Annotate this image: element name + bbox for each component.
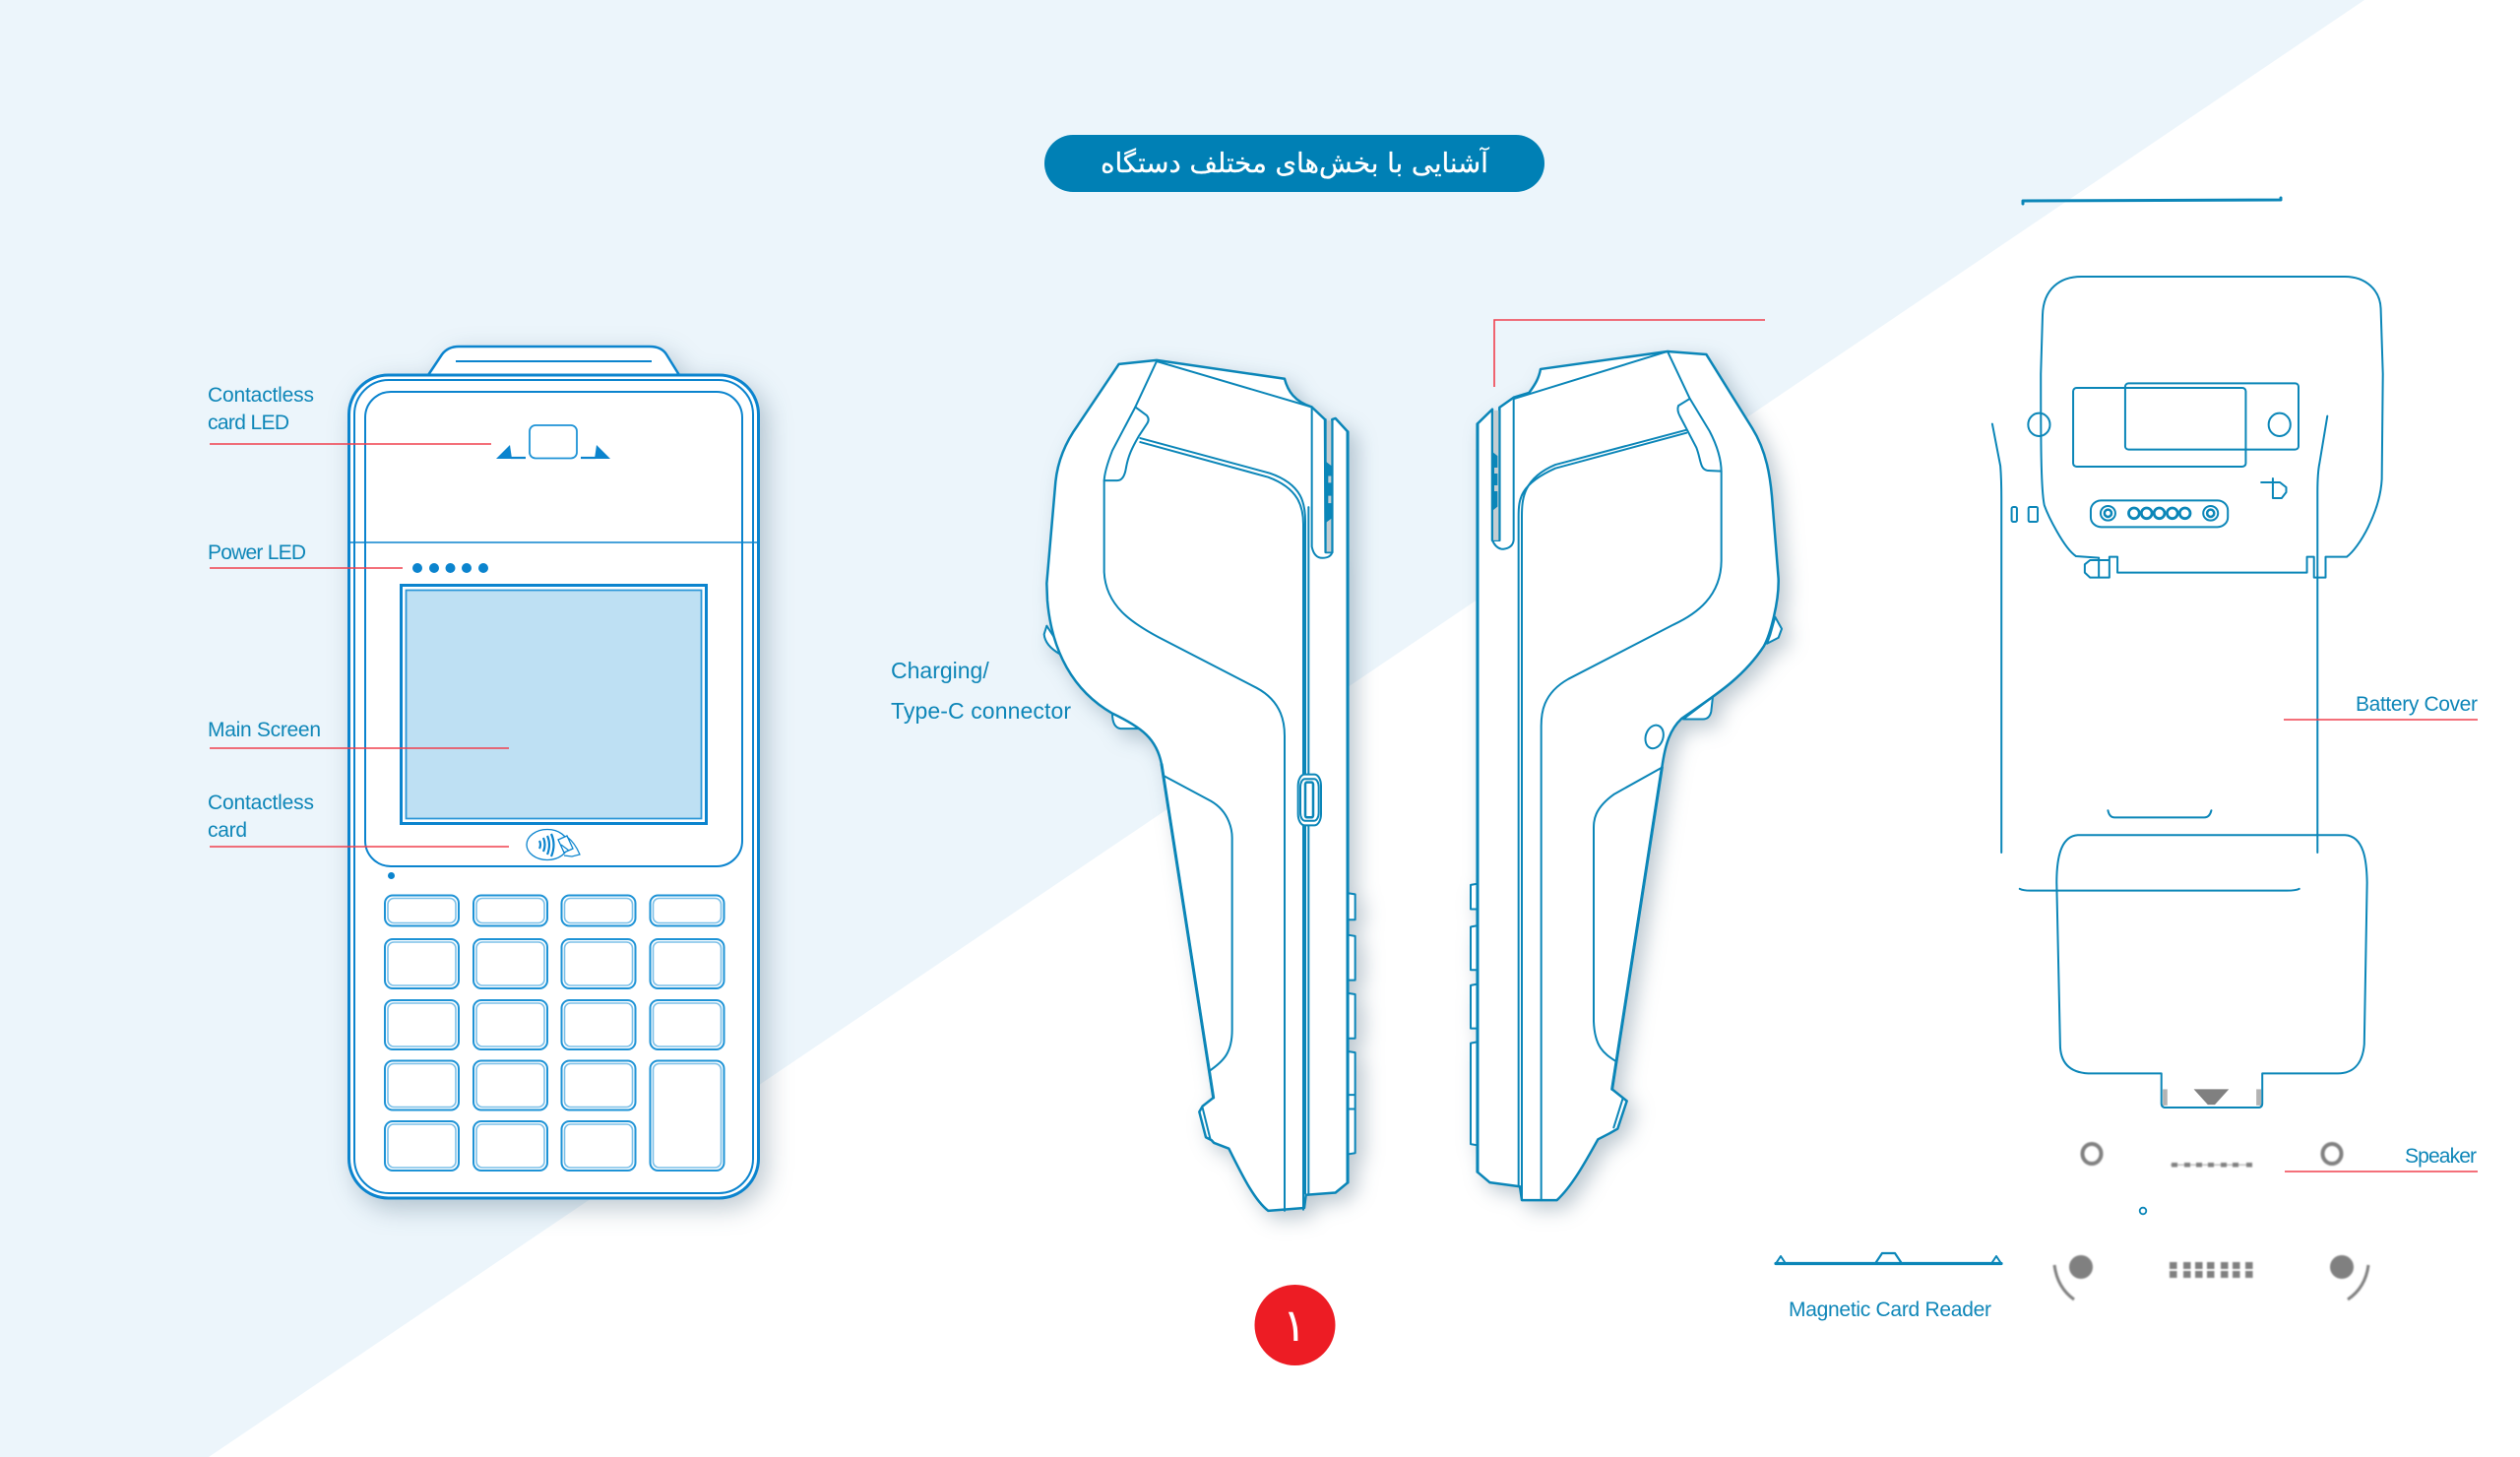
- left side view of the device: [1044, 360, 1355, 1211]
- magnetic card reader icon: [1776, 1253, 2001, 1264]
- front upper panel: [365, 392, 742, 866]
- outer case walls: [1992, 424, 2001, 853]
- title pill: [1044, 135, 1544, 192]
- indicator dot: [388, 872, 395, 879]
- label: charging / type-c connector: Charging/: [891, 658, 989, 683]
- battery cover: [2020, 810, 2367, 1108]
- leader lines and labels for the front view: card LED: [208, 412, 289, 434]
- side slots: [2012, 507, 2017, 522]
- contact strip: [2091, 500, 2228, 527]
- label: main screen: Main Screen: [208, 719, 321, 741]
- front body with shadow: [348, 347, 758, 1198]
- contactless card icon: [527, 829, 580, 860]
- slot gap and teeth: [1492, 408, 1499, 540]
- small hole: [2140, 1208, 2146, 1214]
- step number badge: ۱: [1283, 1299, 1306, 1352]
- battery cover label: Battery Cover: [2356, 693, 2478, 716]
- right side view details: [1478, 351, 1722, 1200]
- magnetic card reader label: Magnetic Card Reader: [1789, 1299, 1991, 1321]
- title pill: آشنایی با بخش‌های مختلف دستگاه: [1101, 147, 1489, 179]
- label: charging / type-c connector: [891, 658, 1071, 724]
- side oval button: [1644, 722, 1665, 752]
- left side view details: [1104, 361, 1348, 1211]
- speaker dotted slot: [2171, 1163, 2252, 1168]
- battery compartment rectangles: [2073, 388, 2245, 467]
- leader lines and labels for the front view: card: [208, 819, 247, 842]
- speaker blobs: [2069, 1255, 2354, 1279]
- USB type-C port: [1298, 775, 1321, 825]
- power LED dots: [412, 563, 488, 573]
- bottom holes and speaker grilles (gray): [2054, 1144, 2368, 1299]
- speaker label: Speaker: [2405, 1145, 2477, 1168]
- keypad: [385, 896, 724, 1171]
- right side view of the device: [1471, 351, 1782, 1200]
- speaker grid: [2170, 1262, 2252, 1278]
- red leader line to slot: [1494, 320, 1765, 387]
- screw holes: [2028, 413, 2049, 436]
- label: contactless card: Contactless: [208, 792, 314, 814]
- contactless LED marker: [496, 425, 610, 459]
- label: power LED: Power LED: [208, 541, 306, 564]
- leader lines and labels for the front view: [208, 384, 509, 847]
- rear top edge line: [2023, 198, 2281, 204]
- rear view with cover removed: [1992, 277, 2383, 853]
- battery cover latch (gray): [2163, 1089, 2261, 1106]
- label: charging / type-c connector: Type-C connector: [891, 698, 1071, 724]
- main screen: [402, 585, 707, 823]
- label: contactless card LED: Contactless: [208, 384, 314, 407]
- front view of the device: [348, 347, 758, 1198]
- small glyph: [2261, 478, 2286, 498]
- step number badge: [1254, 1285, 1335, 1365]
- slot gap and teeth: [1326, 419, 1332, 552]
